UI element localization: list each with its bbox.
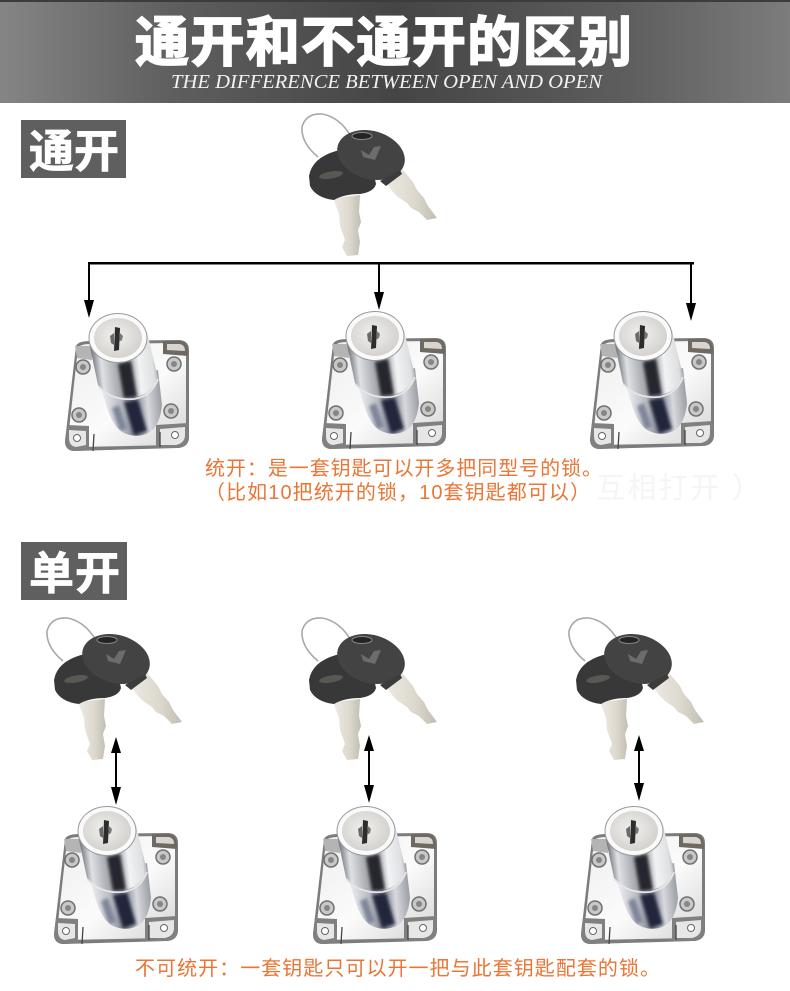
icon: key set 3 bbox=[569, 618, 704, 760]
double arrow 3 bbox=[634, 735, 644, 801]
section label: 通开: 通开 bbox=[29, 126, 119, 177]
lock 5 bbox=[313, 806, 437, 944]
double arrow 2 bbox=[364, 735, 374, 803]
icon: key set 2 bbox=[302, 618, 437, 760]
caption: 通开 explanation bbox=[205, 457, 602, 504]
caption: 通开 explanation: 统开：是一套钥匙可以开多把同型号的锁。 bbox=[205, 457, 602, 480]
lock 6 bbox=[581, 806, 705, 944]
lock 4 bbox=[54, 806, 178, 944]
subtitle: THE DIFFERENCE BETWEEN OPEN AND OPEN bbox=[171, 71, 604, 93]
section label: 单开: 单开 bbox=[29, 548, 120, 599]
lock 1 bbox=[65, 313, 189, 451]
title: 通开和不通开的区别 bbox=[135, 13, 632, 73]
lock 2 bbox=[322, 311, 446, 449]
caption: 单开 explanation: 不可统开：一套钥匙只可以开一把与此套钥匙配套的锁。 bbox=[135, 957, 660, 980]
lock 3 bbox=[590, 311, 714, 449]
double arrow 1 bbox=[111, 737, 121, 805]
arrow tree: one key set to three locks bbox=[84, 262, 696, 321]
icon: key set top bbox=[302, 114, 437, 256]
icon: key set 1 bbox=[47, 618, 182, 760]
header banner bbox=[0, 0, 790, 103]
caption: 通开 explanation: （比如10把统开的锁，10套钥匙都可以） bbox=[205, 481, 590, 504]
faint residual text: 互相打开 ） bbox=[596, 472, 761, 505]
